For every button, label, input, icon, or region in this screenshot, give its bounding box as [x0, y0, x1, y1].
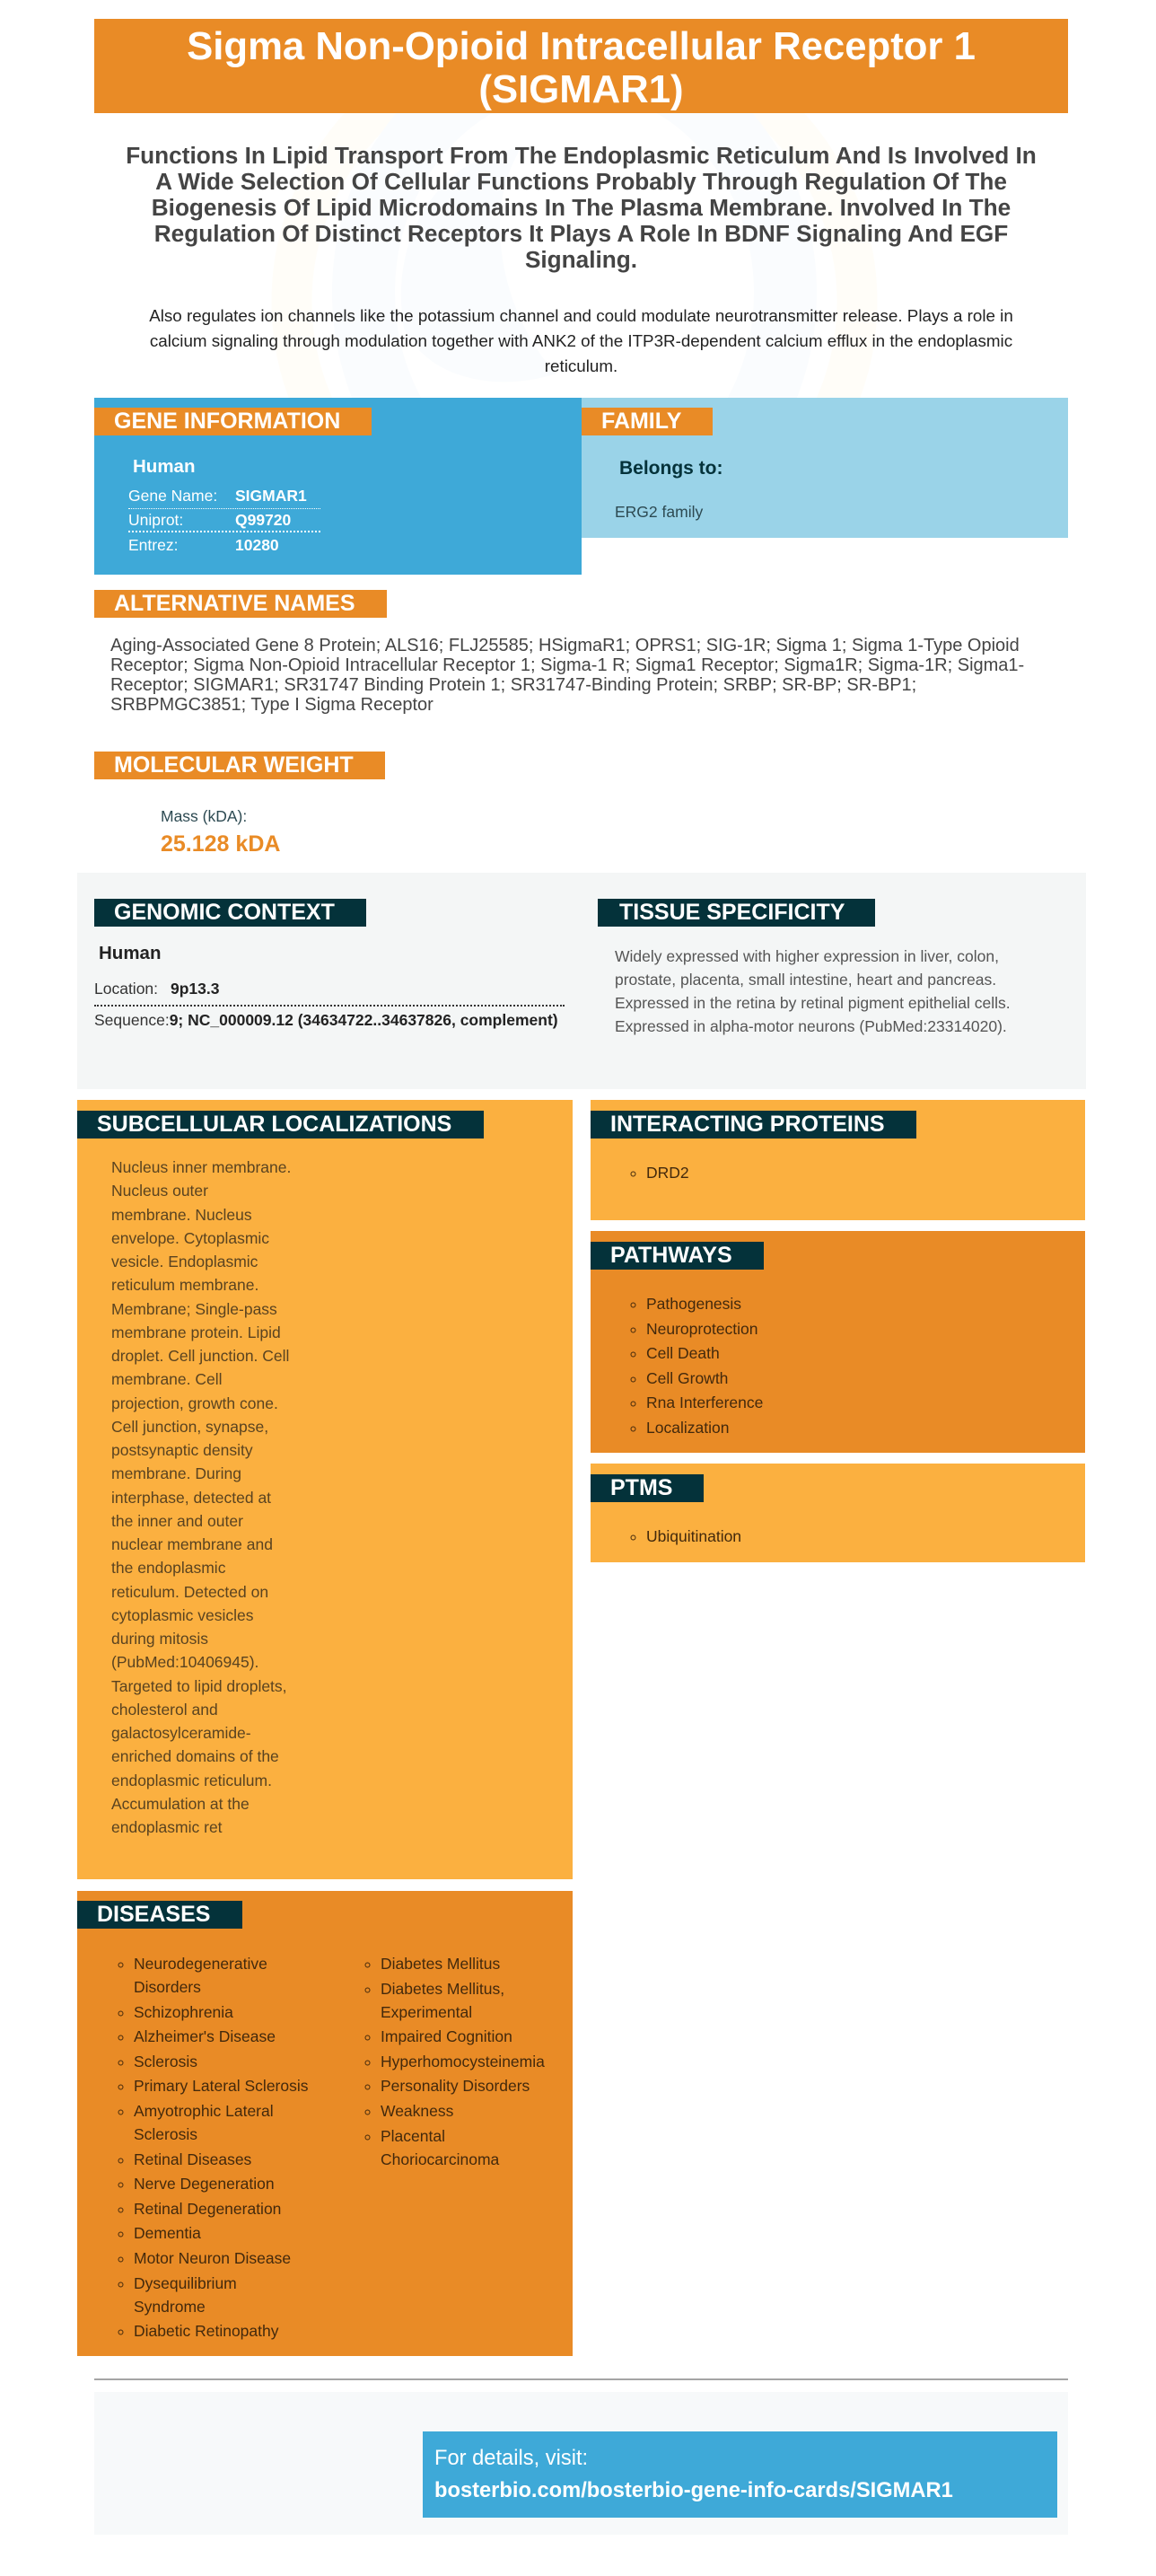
localization text: vesicle. Endoplasmic [111, 1253, 258, 1270]
location row [94, 980, 565, 1007]
species: Human [133, 456, 195, 477]
description paragraph: calcium signaling through modulation together with ANK2 of the ITP3R-dependent calcium efflux in the endoplasmic [150, 331, 1012, 350]
localization text [111, 1158, 291, 1836]
localization text: (PubMed:10406945). [111, 1653, 258, 1671]
disease list column 2: Impaired Cognition [381, 2027, 512, 2045]
panel: interacting proteins [591, 1100, 1085, 1220]
panel: footer [94, 2392, 1068, 2535]
localization text: Membrane; Single-pass [111, 1300, 277, 1318]
pathways list [630, 1295, 763, 1437]
gene name row: SIGMAR1 [235, 487, 307, 505]
localization text: Nucleus inner membrane. [111, 1158, 291, 1176]
localization text: endoplasmic reticulum. [111, 1771, 272, 1789]
callout: details link [423, 2431, 1057, 2518]
heading: subcellular localizations: SUBCELLULAR LOCALIZATIONS [97, 1112, 451, 1137]
ptms list: Ubiquitination [646, 1527, 741, 1545]
entrez row: Entrez: [128, 536, 178, 554]
title [94, 19, 1068, 113]
tissue specificity text: Widely expressed with higher expression in liver, colon, [615, 947, 999, 965]
subtitle: Signaling. [525, 246, 637, 273]
pathways list: Neuroprotection [646, 1320, 758, 1338]
heading: gene information: GENE INFORMATION [114, 409, 340, 434]
disease list column 2: Weakness [381, 2102, 453, 2120]
disease list column 1: Nerve Degeneration [134, 2175, 275, 2193]
uniprot row: Uniprot: [128, 511, 183, 529]
panel: gene information [94, 398, 582, 575]
disease list column 1: Motor Neuron Disease [134, 2249, 291, 2267]
entrez row [128, 536, 279, 554]
heading: family [582, 408, 713, 435]
heading: tissue specificity: TISSUE SPECIFICITY [619, 900, 845, 925]
localization text: cholesterol and [111, 1701, 218, 1719]
localization text: membrane protein. Lipid [111, 1323, 281, 1341]
localization text: galactosylceramide- [111, 1724, 251, 1742]
uniprot row [128, 511, 320, 532]
panel: pathways [591, 1231, 1085, 1453]
disease list column 2: Diabetes Mellitus, [381, 1980, 504, 1998]
gene name row [128, 487, 320, 509]
heading: ptms [591, 1474, 704, 1502]
pathways list: Cell Growth [646, 1369, 728, 1387]
localization text: Accumulation at the [111, 1795, 250, 1813]
tissue specificity text [615, 947, 1011, 1035]
subtitle: Functions In Lipid Transport From The Endoplasmic Reticulum And Is Involved In [126, 142, 1037, 169]
subtitle: Regulation Of Distinct Receptors It Plays A Role In BDNF Signaling And EGF [154, 220, 1008, 247]
heading: pathways [591, 1242, 764, 1270]
heading: ptms: PTMS [610, 1475, 672, 1500]
entrez row: 10280 [235, 536, 279, 554]
description paragraph [149, 306, 1013, 375]
description paragraph: Also regulates ion channels like the potassium channel and could modulate neurotransmitter release. Plays a role in [149, 306, 1013, 325]
localization text: the endoplasmic [111, 1559, 225, 1577]
location row: Location: [94, 980, 158, 998]
tissue specificity text: prostate, placenta, small intestine, heart and pancreas. [615, 971, 996, 989]
disease list column 1: Schizophrenia [134, 2003, 233, 2021]
callout label: For details, visit: [434, 2447, 588, 2470]
heading: molecular weight: MOLECULAR WEIGHT [114, 752, 354, 778]
localization text: Cell junction, synapse, [111, 1418, 268, 1436]
alternative names text: Receptor; SIGMAR1; SR31747 Binding Protein 1; SR31747-Binding Protein; SRBP; SR-BP; SR-BP1; [110, 675, 916, 695]
interacting list: DRD2 [646, 1164, 689, 1182]
disease list column 2: Experimental [381, 2003, 472, 2021]
title: (SIGMAR1) [478, 67, 684, 111]
localization text: Nucleus outer [111, 1182, 208, 1200]
disease list column 2: Choriocarcinoma [381, 2150, 499, 2168]
disease list column 1: Sclerosis [134, 2125, 197, 2143]
heading: pathways: PATHWAYS [610, 1243, 732, 1268]
localization text: droplet. Cell junction. Cell [111, 1347, 289, 1365]
mass value: 25.128 kDA [161, 831, 280, 857]
tissue specificity text: Expressed in alpha-motor neurons (PubMed:23314020). [615, 1017, 1007, 1035]
sequence row: Sequence:9; NC_000009.12 (34634722..34637826, complement) [94, 1011, 558, 1029]
disease list column 1: Alzheimer's Disease [134, 2027, 276, 2045]
disease list column 1: Amyotrophic Lateral [134, 2102, 274, 2120]
panel: diseases [77, 1891, 573, 2356]
disease list column 1: Primary Lateral Sclerosis [134, 2077, 309, 2095]
tissue specificity text: Expressed in the retina by retinal pigment epithelial cells. [615, 994, 1011, 1012]
heading: family: FAMILY [601, 409, 681, 434]
panel: family [582, 398, 1068, 538]
callout url: bosterbio.com/bosterbio-gene-info-cards/SIGMAR1 [434, 2479, 953, 2502]
heading: alternative names: ALTERNATIVE NAMES [114, 591, 355, 616]
alternative names text: SRBPMGC3851; Type I Sigma Receptor [110, 695, 434, 715]
localization text: reticulum. Detected on [111, 1582, 268, 1600]
panel: subcellular localizations [77, 1100, 573, 1879]
disease list column 1: Diabetic Retinopathy [134, 2322, 278, 2340]
disease list column 1: Dementia [134, 2224, 201, 2242]
mass label: Mass (kDA): [161, 807, 247, 825]
localization text: the inner and outer [111, 1512, 243, 1530]
alternative names text: Aging-Associated Gene 8 Protein; ALS16; FLJ25585; HSigmaR1; OPRS1; SIG-1R; Sigma 1; Sigma 1-Type Opioid [110, 636, 1020, 655]
description paragraph: reticulum. [545, 356, 617, 375]
localization text: during mitosis [111, 1630, 208, 1648]
disease list column 1: Dysequilibrium [134, 2274, 237, 2292]
pathways list: Localization [646, 1419, 729, 1437]
disease list column 1: Retinal Diseases [134, 2150, 251, 2168]
localization text: reticulum membrane. [111, 1276, 258, 1294]
localization text: enriched domains of the [111, 1747, 279, 1765]
localization text: postsynaptic density [111, 1441, 253, 1459]
disease list column 1: Sclerosis [134, 2053, 197, 2070]
heading: genomic context: GENOMIC CONTEXT [114, 900, 335, 925]
localization text: cytoplasmic vesicles [111, 1606, 254, 1624]
disease list column 1: Syndrome [134, 2298, 206, 2316]
background watermark [251, 113, 898, 399]
localization text: Targeted to lipid droplets, [111, 1677, 287, 1695]
pathways list: Cell Death [646, 1344, 720, 1362]
disease list column 1: Disorders [134, 1978, 201, 1996]
pathways list: Pathogenesis [646, 1295, 741, 1313]
disease list column 2: Personality Disorders [381, 2077, 530, 2095]
heading: interacting proteins: INTERACTING PROTEINS [610, 1112, 885, 1137]
subtitle: Biogenesis Of Lipid Microdomains In The Plasma Membrane. Involved In The [152, 194, 1011, 221]
heading: diseases [77, 1901, 242, 1929]
disease list column 2: Hyperhomocysteinemia [381, 2053, 545, 2070]
heading: diseases: DISEASES [97, 1902, 210, 1927]
subtitle [126, 142, 1037, 273]
family value: ERG2 family [615, 503, 703, 521]
species: Human [99, 943, 161, 963]
localization text: endoplasmic ret [111, 1818, 223, 1836]
subtitle: A Wide Selection Of Cellular Functions Probably Through Regulation Of The [155, 168, 1007, 195]
location row: 9p13.3 [171, 980, 219, 998]
disease list column 2 [364, 1955, 545, 2168]
localization text: membrane. Cell [111, 1370, 223, 1388]
pathways list: Rna Interference [646, 1394, 763, 1411]
panel: genomic context and tissue specificity [77, 873, 1086, 1089]
localization text: interphase, detected at [111, 1489, 271, 1507]
gene name row: Gene Name: [128, 487, 217, 505]
disease list column 1: Retinal Degeneration [134, 2200, 281, 2218]
disease list column 1 [118, 1955, 309, 2340]
uniprot row: Q99720 [235, 511, 291, 529]
localization text: membrane. Nucleus [111, 1205, 252, 1223]
belongs to: Belongs to: [619, 458, 723, 479]
disease list column 2: Diabetes Mellitus [381, 1955, 500, 1973]
localization text: envelope. Cytoplasmic [111, 1229, 269, 1247]
panel: ptms [591, 1464, 1085, 1562]
disease list column 2: Placental [381, 2127, 445, 2145]
localization text: membrane. During [111, 1464, 241, 1482]
localization text: nuclear membrane and [111, 1535, 273, 1553]
disease list column 1: Neurodegenerative [134, 1955, 267, 1973]
alternative names text: Receptor; Sigma Non-Opioid Intracellular Receptor 1; Sigma-1 R; Sigma1 Receptor; Sigma1R; Sigma-1R; Sigma1- [110, 655, 1024, 675]
localization text: projection, growth cone. [111, 1394, 278, 1411]
alternative names text [110, 636, 1024, 715]
title: Sigma Non-Opioid Intracellular Receptor 1 [187, 24, 976, 68]
